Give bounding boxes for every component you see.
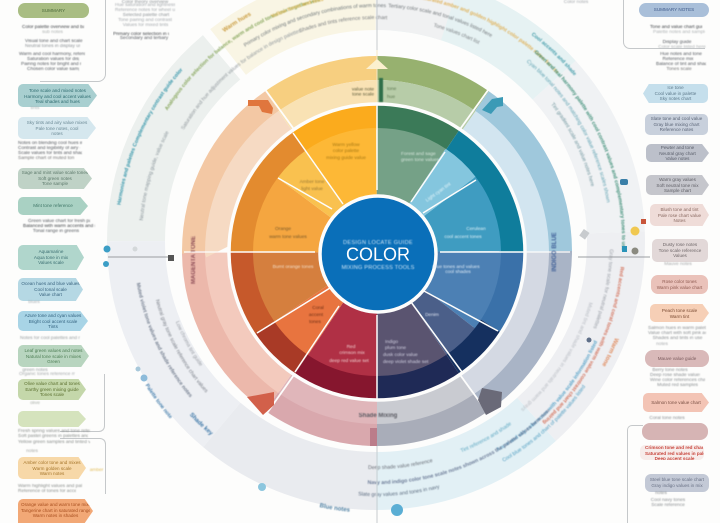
top center text: Tone pairing and contrast [118, 18, 172, 23]
wheel labels: Burnt orange tones [273, 264, 314, 270]
side ring labels: INDIGO BLUE [552, 232, 558, 272]
wheel labels: value note [352, 86, 374, 92]
wheel labels: tone [387, 86, 397, 92]
axis lines [108, 0, 650, 523]
box: light blue note: Ice tone [667, 85, 684, 90]
box: sky note: Tints [48, 324, 58, 329]
pill: blue heading: SUMMARY NOTES [654, 7, 694, 12]
box: gray-blue note [645, 114, 708, 135]
wheel labels: warm tone values [269, 234, 307, 240]
wheel labels: color palette [333, 148, 359, 154]
inner wheel sectors [315, 190, 439, 314]
curved annotation text: Harmonies and palettes Complementary contrast guide color [116, 68, 183, 206]
box: olive note [18, 379, 86, 400]
right column: Mauve notes [664, 262, 692, 267]
inner wheel rim [242, 117, 512, 387]
side ring labels: MAGENTA TONE [191, 236, 197, 284]
top center text: Hue saturation and lightness [115, 3, 175, 8]
top center text [113, 0, 176, 41]
box: pale blue note: Sky tints and airy value mixes [27, 120, 87, 125]
box: salmon note: Salmon tone value chart [651, 400, 701, 405]
right column upper caption: Color notes [564, 0, 588, 5]
left column: amber [90, 468, 103, 473]
box: peach note: Warm tint [670, 314, 689, 318]
box: orange note: Tangerine chart in saturated range [21, 508, 90, 512]
right column: Display guide [663, 40, 691, 45]
box: mint note: Mint tone reference [33, 203, 73, 208]
top center text: Selected palette chart [123, 13, 169, 18]
box: warm gray note [646, 175, 709, 195]
box: gray note: Value notes [666, 156, 689, 161]
box: green note: Leaf green values and notes [24, 348, 82, 353]
box: pink note: Blush tone and tint [660, 207, 699, 212]
arrow: orange marker [248, 100, 273, 114]
wheel labels: Cerulean [466, 226, 486, 232]
curved annotation text: Cyan blue tonal notes and matching color value reference scales shown [526, 59, 610, 203]
curved annotation text: Green and teal harmony palette with cool contrast values and complementary tones to use [534, 50, 626, 250]
box: teal note: Harmony and cool accent values [24, 94, 91, 98]
box: dusty pink note [652, 239, 708, 262]
curved annotation text: Palette tone note [145, 383, 172, 419]
wheel ring and spokes [229, 104, 525, 400]
pill: green heading [18, 3, 89, 18]
box: amber note [18, 457, 86, 479]
wheel labels: green tone values [401, 157, 440, 163]
box: light blue note [643, 84, 708, 103]
wheel labels: Red [347, 344, 356, 350]
wheel labels: Orange [275, 226, 291, 232]
right column: Shades and tints in use [653, 336, 702, 341]
box: pale blue note: Pale tone notes, cool [36, 126, 78, 130]
right column: Cool navy tones [651, 498, 685, 503]
outer annotation ring [136, 1, 616, 481]
curved annotation text: Tone values chart list [434, 22, 480, 44]
box: gray note: Neutral gray chart [659, 150, 696, 156]
box: pink note: Pale rose chart value [658, 212, 701, 218]
box: sage note: Sage and mint value scale tones [22, 170, 88, 175]
box: pink note [650, 204, 709, 226]
box: gray note: Pewter and tone [661, 145, 694, 150]
arrow: coral marker [247, 392, 274, 415]
box: sage note: Soft green notes [38, 176, 72, 180]
curved annotation text: Shades and tints reference scale chart [299, 15, 388, 32]
box: rose note [651, 275, 708, 294]
box: pink note: Notes [673, 218, 686, 223]
wheel labels: accent [309, 312, 324, 318]
curved annotation text: Warm hues [222, 12, 252, 32]
pill: blue heading [639, 3, 709, 17]
curved annotation text: Muted tint and shade values in neutrals and warm grays [521, 302, 593, 411]
box: gray note [646, 144, 709, 162]
box: blue note: Cool tonal scale [34, 286, 67, 292]
pill: blue gray: Steel blue tone scale chart [650, 477, 704, 482]
curved annotation text: Warm tone [602, 338, 620, 367]
left column [18, 3, 104, 523]
curved annotation text: Muted violet tone values and shade reference notes [136, 282, 192, 398]
pill: blue gray: Gray indigo values in mix [651, 482, 703, 488]
curved annotation text: Tint reference and shade [460, 422, 512, 452]
box: salmon note [643, 393, 709, 412]
box: pale blue note: notes [51, 131, 63, 136]
box: blue note [18, 278, 83, 301]
box: orange note: Warm notes in shades [33, 513, 78, 518]
top center text: Color theory overview [122, 0, 168, 5]
box: pale green note [18, 411, 86, 427]
box: dusty pink note: Tone scale reference [659, 248, 701, 252]
curved annotation text: Slate gray values and tones in navy [358, 485, 440, 498]
center circle [320, 196, 436, 312]
wheel labels: Forest and sage [401, 151, 436, 157]
wheel labels: Indigo [385, 339, 398, 345]
text block: notes [655, 491, 667, 496]
right column: Reference mix [663, 57, 693, 62]
wheel labels: hue [387, 94, 395, 100]
ring icons [103, 179, 646, 516]
box: aqua note: Aqua tone in mix [34, 254, 68, 260]
top center text: Values for mixed tints [123, 23, 168, 28]
wheel labels: Light cyan tint [425, 181, 453, 204]
wheel labels: dusk color value [383, 352, 418, 358]
box: red lined note [640, 445, 704, 460]
middle ring: outer band [194, 68, 560, 434]
box: pale blue note [18, 117, 96, 139]
box: orange note [18, 499, 93, 523]
curved annotation text: Deep shade value reference [368, 458, 433, 470]
curved annotation text: Navy and indigo color tone scale notes shown across the palette values here now [367, 408, 550, 486]
small pointer: bottom marker [370, 428, 377, 446]
box: sage note: Tone sample [42, 181, 68, 186]
box: warm gray note: Soft neutral tone mix [656, 182, 699, 188]
box: light blue note: Sky notes chart [660, 96, 691, 101]
side ring labels: Shade Mixing [359, 413, 398, 419]
box: peach note [650, 304, 709, 322]
box: light blue note: Cool value in palette [655, 90, 696, 96]
box: green note [18, 345, 89, 367]
box: green note: Green [47, 359, 60, 364]
curved annotation text: Neutral tone mapping guide, value scale [139, 131, 169, 221]
box: olive note: Olive value chart and tones [24, 381, 80, 386]
box: mint note [18, 197, 88, 215]
curved annotation text: Saturation and hue adjustment values for balance in design palettes [180, 29, 302, 130]
box: sky note [18, 311, 88, 331]
arrow: slate marker [478, 388, 502, 415]
box: aqua note: Values scale [38, 260, 64, 265]
box: teal note: Tone scale and mixed notes [29, 88, 86, 93]
curved annotation text: Blue notes [319, 502, 350, 512]
wheel labels: tones [309, 319, 321, 325]
box: aqua note [18, 245, 84, 270]
box: rose note: Rose color tones [662, 279, 697, 284]
box: gray-blue note: Reference notes [660, 127, 693, 132]
box: amber note: Warm notes [40, 471, 64, 476]
side ring labels [191, 232, 558, 419]
wheel labels: Warm yellow [332, 142, 360, 148]
left column: sub notes [42, 30, 63, 35]
wheel labels: plum tone [385, 345, 406, 351]
left column: notes [26, 449, 38, 454]
curved annotation text [116, 0, 626, 512]
right column: Tones scale [666, 67, 692, 72]
box: mauve note: Mauve value guide [658, 356, 696, 361]
pill: mauve [642, 423, 708, 440]
left column: blues [28, 300, 40, 305]
box: aqua note: Aquamarine [39, 249, 63, 254]
wheel labels: Coral [312, 305, 324, 311]
curved annotation text: Tertiary color scale and tonal values listed here [388, 3, 492, 38]
left column: tints [31, 106, 39, 111]
box: teal note [18, 84, 97, 107]
wheel labels: mixing guide value [326, 155, 366, 161]
wheel labels: deep red value set [329, 358, 369, 364]
left column: Tonal range in greens [33, 229, 79, 234]
pill: green heading: SUMMARY [42, 8, 65, 13]
wheel labels: Denim [425, 312, 439, 318]
box: blue note: Ocean hues and blue values [21, 281, 80, 286]
left column: green notes [22, 368, 48, 373]
wheel labels: tone scale [352, 92, 374, 98]
box: rose note: Warm pink value chart [657, 284, 702, 290]
box: mauve note [645, 350, 709, 367]
box: sky note: Bright cool accent scale [29, 318, 77, 324]
curved annotation text: Shade key [190, 412, 214, 436]
wheel labels: crimson mix [339, 350, 365, 356]
box: olive note: Tones scale [40, 392, 64, 397]
center circle: DESIGN LOCATE GUIDE [343, 240, 413, 246]
wheel labels: light value [301, 186, 323, 192]
top center text: Secondary and tertiary [120, 36, 168, 41]
box: sky note: Azure tone and cyan values [25, 313, 81, 318]
box: teal note: Teal shades and hues [35, 99, 80, 104]
box: olive note: Earthy green mixing guide [25, 386, 79, 392]
middle ring dividers [184, 50, 570, 416]
text block: Berry tone notes [652, 368, 688, 373]
box: dusty pink note: Dusty rose notes [663, 242, 697, 247]
curved annotation text: Primary color mixing and secondary combinations of warm tones [243, 3, 386, 47]
curved annotation text: Cool blue tones and chart of palette values listed [502, 384, 586, 462]
wheel labels [269, 78, 486, 365]
left column: olive [30, 401, 40, 406]
right column: Color scale listed here [658, 45, 706, 50]
pill: blue gray [645, 474, 709, 492]
box: peach note: Peach tone scale [662, 308, 697, 313]
box: gray-blue note: Slate tone and cool value [651, 116, 702, 121]
right column: Scale reference [651, 503, 685, 508]
wheel labels: deep violet shade set [383, 359, 429, 365]
curved annotation text: Azure and sky color notes with value scale information listed [496, 340, 598, 452]
wheel labels: Blue tones and values [432, 264, 480, 270]
right column: Hue notes and tone [660, 52, 702, 57]
right column: Muted red samples [657, 383, 698, 388]
curved annotation text: Analogous color selection for balance, warm and cool tones mix together well [164, 0, 320, 111]
wheel labels: cool shades [445, 269, 471, 275]
curved annotation text: Tint gradient scale and value notes here [552, 102, 594, 187]
curved annotation text: Cool accents and shade [531, 32, 576, 76]
box: blue note: Value chart [39, 292, 62, 297]
arrow: top triangle [366, 59, 388, 69]
right column: notes [656, 342, 668, 347]
curved annotation text: Red accents and coral tones with warm value contrast chart and pairing [542, 266, 625, 424]
box: amber note: Amber color tone and mixes [23, 460, 81, 465]
curved annotation text: Gray tone scale for neutral palettes [593, 249, 614, 329]
wheel labels: Amber tone [300, 179, 325, 185]
curved annotation text: Neutral gray tone scale reference chart values [156, 299, 208, 393]
center circle: MIXING PROCESS TOOLS [341, 265, 415, 271]
curved annotation text: Low chroma tint guide [176, 320, 202, 366]
box: amber note: Warm golden scale [32, 466, 72, 470]
middle ring: inner band [217, 92, 537, 412]
box: warm gray note: Sample chart [664, 188, 691, 193]
box: sage note [18, 168, 92, 189]
right column: Coral tone notes [649, 416, 685, 421]
box: dusty pink note: Values [673, 253, 687, 258]
center circle: COLOR [346, 244, 410, 264]
box: gray-blue note: Gray blue mixing chart [654, 122, 699, 126]
right column [639, 3, 709, 508]
arrow: teal marker [482, 97, 503, 114]
wheel labels: cool accent tones [444, 234, 482, 240]
box: green note: Natural tone scale in mixes [26, 354, 81, 358]
box: warm gray note: Warm gray values [659, 177, 696, 182]
